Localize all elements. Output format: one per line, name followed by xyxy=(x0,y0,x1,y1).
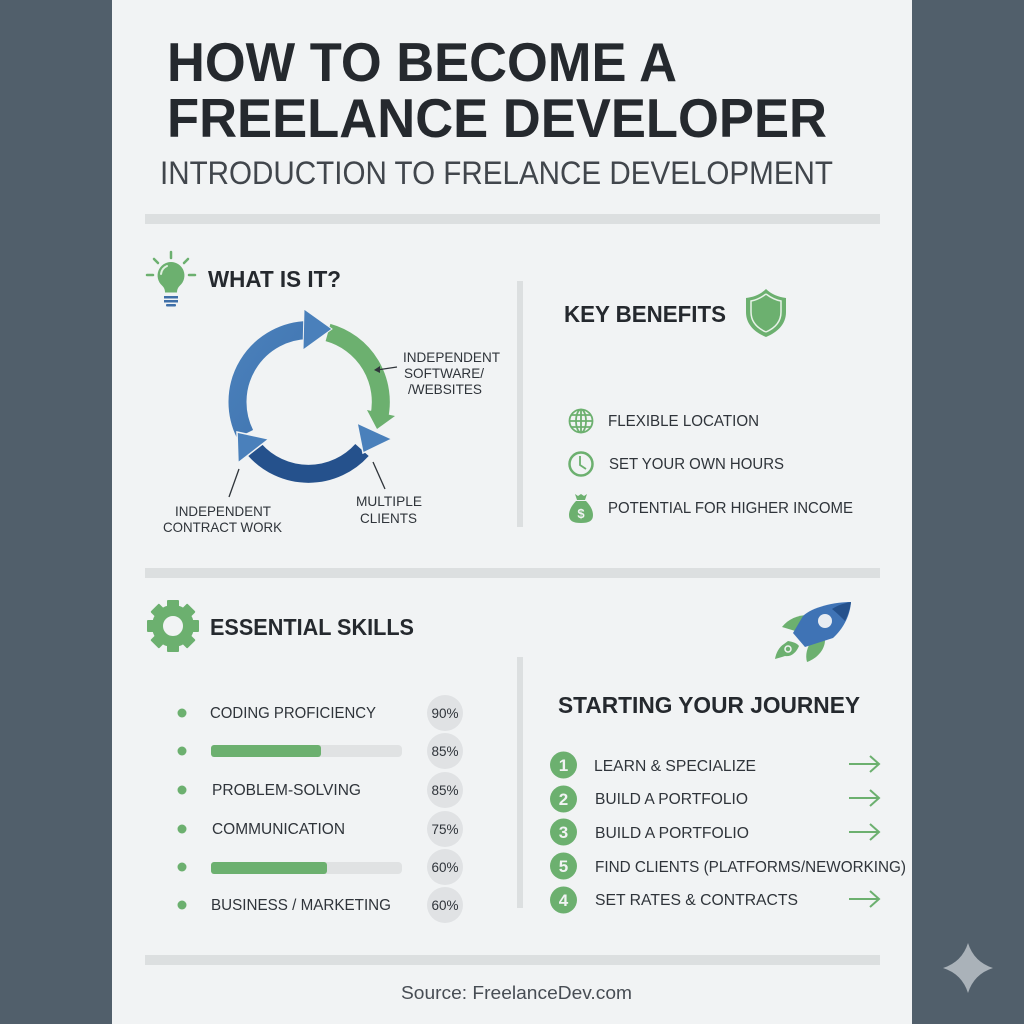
skill: progress bar 85% xyxy=(178,733,463,769)
step 4: SET RATES & CONTRACTS xyxy=(595,892,798,909)
skill: coding proficiency: 90% xyxy=(431,706,459,721)
icon: shield xyxy=(746,289,786,337)
icon: sparkle star xyxy=(943,943,993,993)
panel: essential skills xyxy=(147,600,463,923)
benefit: set your own hours: SET YOUR OWN HOURS xyxy=(609,456,784,473)
heading: what is it: WHAT IS IT? xyxy=(208,266,341,292)
skill: coding proficiency: CODING PROFICIENCY xyxy=(210,705,376,722)
step 2 xyxy=(550,786,879,812)
skill: progress bar 60%: 60% xyxy=(431,860,459,875)
label: independent software / websites xyxy=(374,349,500,397)
step 3: BUILD A PORTFOLIO xyxy=(595,825,749,842)
step 3: 3 xyxy=(559,823,568,842)
step 2: BUILD A PORTFOLIO xyxy=(595,791,748,808)
benefit: flexible location xyxy=(570,410,759,432)
step 5: 5 xyxy=(559,857,568,876)
panel: page sheet xyxy=(112,0,912,1024)
label: independent software / websites: INDEPENDENT xyxy=(403,349,500,365)
icon: rocket xyxy=(775,602,851,662)
panel: what is it xyxy=(147,252,500,535)
label: independent contract work: CONTRACT WORK xyxy=(163,519,283,535)
skill: problem-solving xyxy=(178,772,463,808)
heading: essential skills: ESSENTIAL SKILLS xyxy=(210,614,414,640)
step 1: 1 xyxy=(559,756,568,775)
benefit: set your own hours xyxy=(570,452,784,476)
skill: communication: 75% xyxy=(431,822,459,837)
title: FREELANCE DEVELOPER xyxy=(167,87,827,149)
source line: Source: FreelanceDev.com xyxy=(401,983,632,1003)
label: independent software / websites: SOFTWARE/ xyxy=(404,365,484,381)
panel: starting your journey xyxy=(550,602,906,914)
subtitle: INTRODUCTION TO FRELANCE DEVELOPMENT xyxy=(160,155,833,191)
step 3 xyxy=(550,818,879,846)
skill: progress bar 85%: 85% xyxy=(431,744,459,759)
label: multiple clients xyxy=(356,462,422,526)
skill: business / marketing xyxy=(178,887,463,923)
panel: key benefits xyxy=(564,289,853,523)
heading: key benefits: KEY BENEFITS xyxy=(564,301,726,327)
icon: light bulb xyxy=(147,252,195,306)
label: multiple clients: MULTIPLE xyxy=(356,493,422,509)
skill: communication xyxy=(178,811,463,847)
skill: problem-solving: PROBLEM-SOLVING xyxy=(212,782,361,799)
icon: gear xyxy=(147,600,199,652)
step 4: 4 xyxy=(559,891,569,910)
skill: business / marketing: BUSINESS / MARKETING xyxy=(211,897,391,914)
title: HOW TO BECOME A xyxy=(167,31,677,93)
step 1: LEARN & SPECIALIZE xyxy=(594,758,756,775)
benefit: potential for higher income xyxy=(569,494,853,523)
skill: progress bar 60% xyxy=(178,849,463,885)
skill: problem-solving: 85% xyxy=(431,783,459,798)
benefit: flexible location: FLEXIBLE LOCATION xyxy=(608,413,759,430)
title xyxy=(167,31,827,149)
benefit: potential for higher income: $ xyxy=(577,506,585,521)
benefit: potential for higher income: POTENTIAL FOR HIGHER INCOME xyxy=(608,500,853,517)
step 2: 2 xyxy=(559,790,568,809)
heading: starting your journey: STARTING YOUR JOURNEY xyxy=(558,692,860,718)
label: independent software / websites: /WEBSITES xyxy=(408,381,482,397)
label: multiple clients: CLIENTS xyxy=(360,510,417,526)
step 4 xyxy=(550,886,879,914)
skill: communication: COMMUNICATION xyxy=(212,821,345,838)
skill: business / marketing: 60% xyxy=(431,898,459,913)
cycle diagram xyxy=(237,309,395,474)
label: independent contract work xyxy=(163,469,283,535)
skill: coding proficiency xyxy=(178,695,463,731)
step 5 xyxy=(550,852,906,880)
step 5: FIND CLIENTS (PLATFORMS/NEWORKING) xyxy=(595,859,906,876)
label: independent contract work: INDEPENDENT xyxy=(175,503,271,519)
step 1 xyxy=(550,752,879,778)
